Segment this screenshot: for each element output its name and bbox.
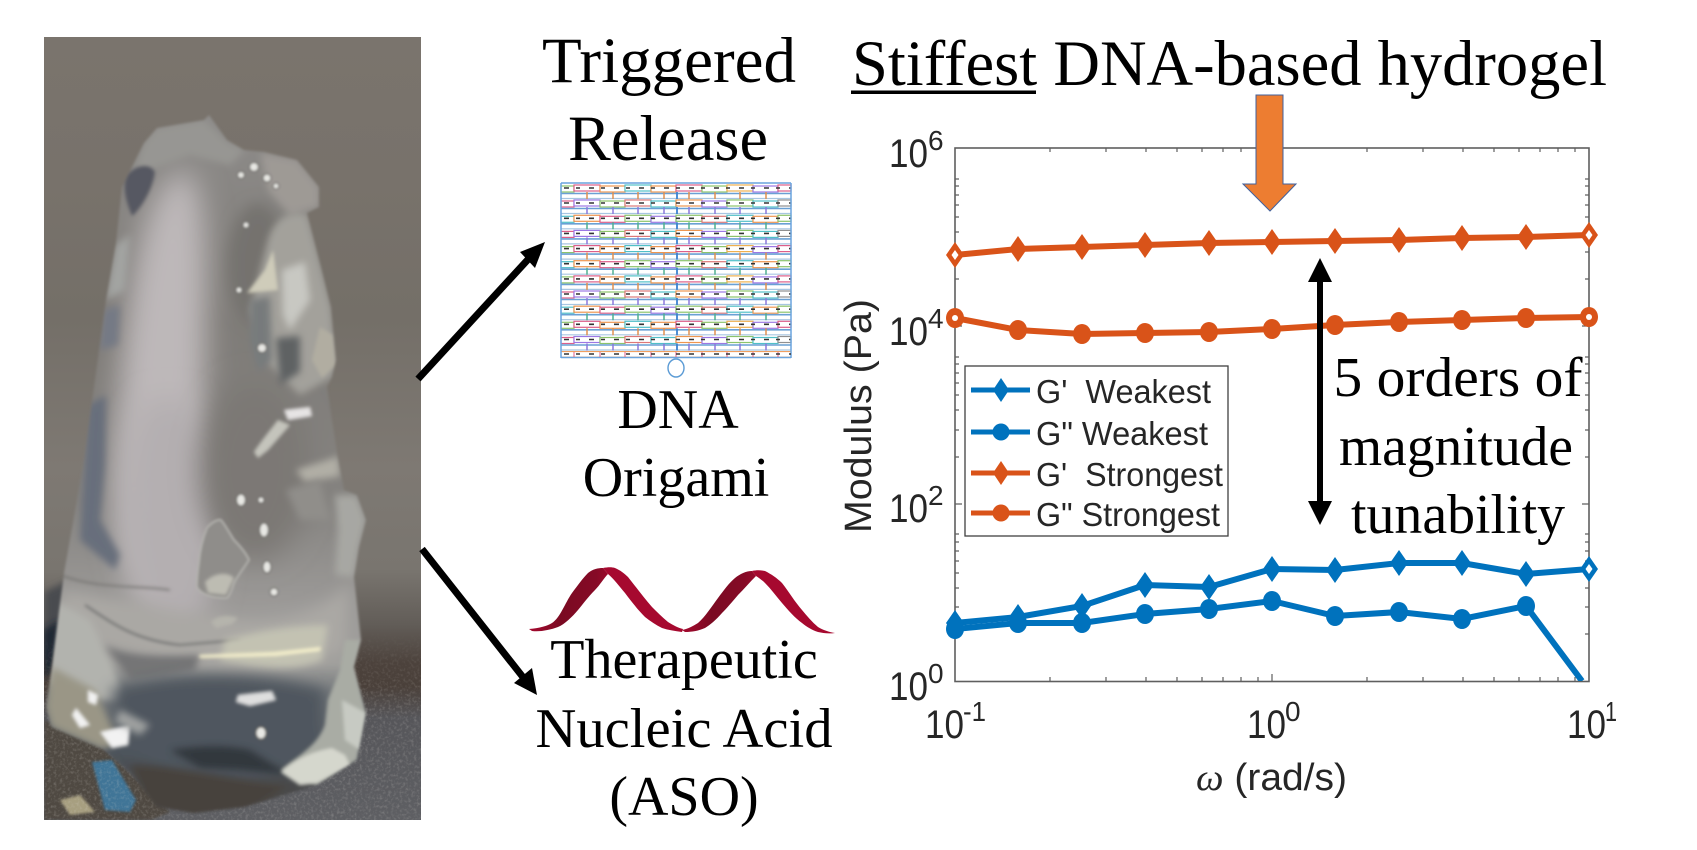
arrow: orange down arrow (1243, 95, 1296, 211)
y axis tick labels: 10 (889, 487, 928, 531)
label: therapeutic nucleic acid (ASO): Therapeutic (550, 629, 818, 691)
legend: G" Weakest (1036, 415, 1208, 452)
series: G'' weakest (946, 591, 1582, 681)
legend: G' Weakest (1036, 373, 1211, 410)
x axis tick labels: 0 (1285, 696, 1301, 727)
series: G'' strongest (946, 307, 1598, 344)
x axis title: ω (rad/s) (1196, 757, 1347, 799)
label: DNA origami: Origami (583, 447, 769, 509)
y axis tick labels: 2 (928, 480, 944, 511)
x axis tick labels: 10 (925, 703, 964, 747)
arrow: double-headed tunability range (1308, 258, 1332, 525)
legend: G" Strongest (1036, 496, 1220, 533)
label: DNA origami: DNA (617, 379, 739, 441)
plot frame and ticks (955, 148, 1589, 682)
heading: triggered release: Triggered (542, 25, 796, 97)
callout: 5 orders of magnitude tunability: 5 orders of (1334, 347, 1583, 409)
chart: modulus vs frequency (838, 125, 1617, 799)
y axis tick labels: 10 (889, 310, 928, 354)
label: therapeutic nucleic acid (ASO) (536, 629, 832, 828)
icon: therapeutic nucleic acid ribbon (529, 567, 835, 633)
y axis tick labels: 6 (928, 125, 944, 156)
legend: G' Strongest (1036, 456, 1223, 493)
y axis tick labels (889, 125, 944, 709)
y axis tick labels: 0 (928, 658, 944, 689)
series: G' weakest (946, 550, 1598, 636)
heading: stiffest DNA-based hydrogel: Stiffest DNA-based hydrogel (852, 28, 1607, 100)
legend (965, 366, 1228, 536)
label: therapeutic nucleic acid (ASO): Nucleic Acid (536, 698, 832, 760)
series: G' strongest (946, 222, 1598, 268)
diagram: DNA origami scaffold (561, 183, 791, 377)
heading: triggered release: Release (568, 103, 768, 175)
callout: 5 orders of magnitude tunability: tunability (1351, 484, 1565, 546)
x axis tick labels: -1 (963, 696, 986, 727)
x axis tick labels: 10 (1567, 703, 1606, 747)
callout: 5 orders of magnitude tunability: magnitude (1339, 416, 1573, 478)
arrow: photo to DNA origami (418, 242, 545, 379)
heading: triggered release (542, 25, 796, 175)
y axis tick labels: 10 (889, 665, 928, 709)
x axis tick labels: 1 (1605, 696, 1617, 727)
y axis tick labels: 10 (889, 132, 928, 176)
arrow: photo to therapeutic nucleic acid (422, 549, 537, 695)
label: therapeutic nucleic acid (ASO): (ASO) (609, 766, 759, 828)
callout: 5 orders of magnitude tunability (1334, 347, 1583, 546)
y axis title: Modulus (Pa) (838, 299, 880, 533)
y axis tick labels: 4 (928, 303, 944, 334)
label: DNA origami (583, 379, 769, 509)
photo: DNA hydrogel cone (44, 37, 421, 820)
x axis tick labels: 10 (1247, 703, 1286, 747)
x axis tick labels (925, 696, 1617, 747)
